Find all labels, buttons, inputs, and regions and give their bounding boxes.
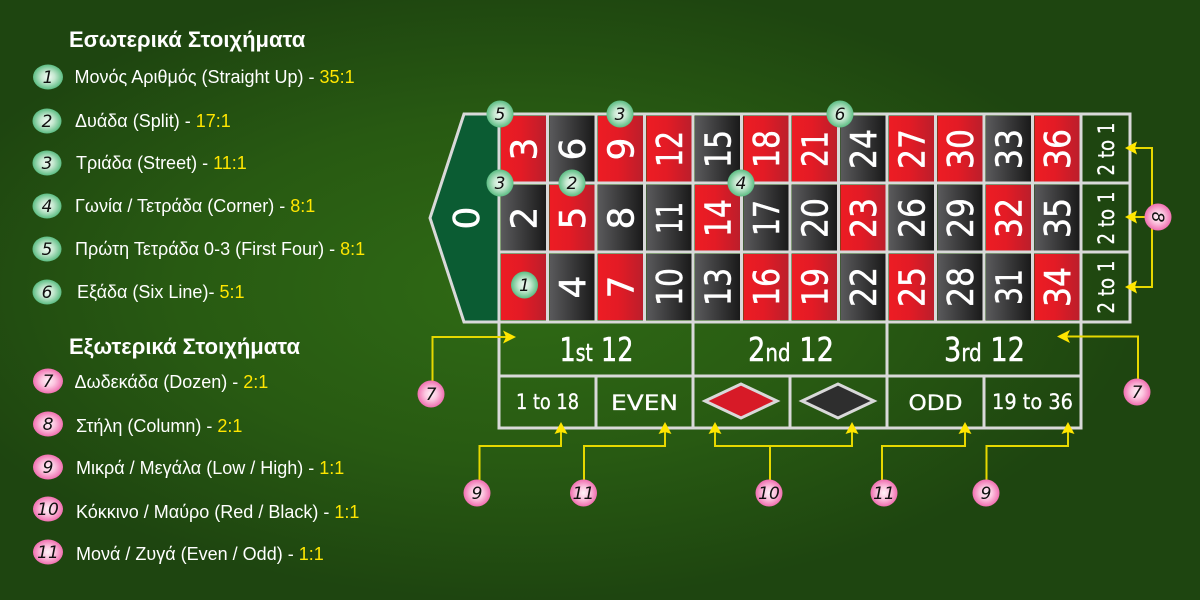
cell 27 — [889, 116, 934, 182]
badge 7 left — [418, 380, 444, 408]
cell 32 — [986, 185, 1031, 251]
cell 3: 3 — [504, 138, 545, 160]
cell 8 — [598, 185, 643, 251]
cell 20 — [792, 185, 837, 251]
cell 2 — [501, 185, 546, 251]
badge 3 — [486, 170, 514, 196]
cell 9: 9 — [601, 138, 642, 160]
legend row 11 — [33, 540, 324, 564]
outside bet labels: EVEN — [611, 391, 678, 415]
badge 11 right — [870, 480, 898, 506]
dozen labels: 2nd 12 — [748, 330, 834, 369]
legend row 9 — [33, 454, 344, 480]
cell 35 — [1034, 185, 1080, 251]
badge 5: 5 — [495, 105, 505, 125]
cell 7: 7 — [601, 276, 642, 298]
cell 23: 23 — [844, 198, 885, 238]
cell 4: 4 — [553, 276, 594, 298]
cell 8: 8 — [601, 207, 642, 229]
cell 11: 11 — [650, 202, 691, 234]
badge 11 right: 11 — [873, 484, 895, 504]
outside bet labels: ODD — [908, 391, 962, 415]
cell 7 — [598, 254, 643, 320]
badge 11 left: 11 — [573, 484, 594, 504]
arrow: 10 — [708, 422, 858, 482]
badge 6: 6 — [835, 105, 846, 125]
badge 7 right: 7 — [1132, 383, 1143, 403]
cell 36: 36 — [1038, 129, 1079, 169]
cell 10: 10 — [650, 268, 691, 306]
cell 26 — [889, 185, 934, 251]
arrow: 7 left — [432, 330, 516, 382]
cell 31 — [986, 254, 1031, 320]
legend row 2: Δυάδα (Split) - 17:1 — [75, 111, 231, 131]
cell 28: 28 — [941, 267, 982, 307]
column bets 2 to 1 — [1095, 122, 1120, 314]
badge 2: 2 — [567, 174, 577, 194]
badge 10: 10 — [758, 484, 780, 504]
legend row 5: Πρώτη Τετράδα 0-3 (First Four) - 8:1 — [75, 239, 365, 259]
cell 15 — [695, 116, 740, 182]
legend row 4: Γωνία / Τετράδα (Corner) - 8:1 — [75, 196, 315, 216]
cell 19 — [792, 254, 837, 320]
badge 6 — [826, 100, 854, 128]
cell 21 — [792, 116, 837, 182]
cell 23 — [840, 185, 886, 251]
cell 32: 32 — [989, 198, 1030, 238]
cell 24: 24 — [844, 129, 885, 169]
badge 3 street — [606, 100, 634, 128]
cell 33 — [986, 116, 1031, 182]
legend row 6 — [32, 280, 244, 304]
cell 20: 20 — [795, 198, 836, 238]
arrow: 9 left — [480, 422, 568, 482]
arrow: 11 left — [584, 422, 672, 482]
cell 3 — [501, 116, 546, 182]
dozen labels — [560, 330, 1025, 369]
badge 4: 4 — [736, 174, 746, 194]
legend row 1 — [33, 64, 355, 90]
zero pocket — [430, 114, 499, 322]
red diamond — [705, 384, 777, 418]
cell 12: 12 — [650, 131, 691, 167]
cell 18: 18 — [747, 130, 788, 168]
badge 11 left — [570, 480, 597, 506]
green badges on table — [486, 100, 854, 298]
arrow: 8 column — [1125, 142, 1152, 294]
legend row 4: 4 — [42, 197, 52, 217]
cell 28 — [938, 254, 982, 320]
cell 13: 13 — [698, 268, 739, 306]
badge 9 left — [464, 480, 490, 506]
cell 9 — [598, 116, 643, 182]
cell 22: 22 — [844, 267, 885, 307]
number cells — [501, 116, 1080, 320]
cell 6: 6 — [553, 138, 594, 160]
cell 13 — [695, 254, 740, 320]
heading: inside bets: Εσωτερικά Στοιχήματα — [69, 27, 306, 52]
cell 27: 27 — [892, 129, 933, 169]
cell 25: 25 — [892, 267, 933, 307]
legend row 2: 2 — [42, 112, 52, 132]
cell 1 — [501, 254, 546, 320]
legend row 10: Κόκκινο / Μαύρο (Red / Black) - 1:1 — [76, 502, 359, 522]
outside bet labels: 1 to 18 — [516, 390, 579, 414]
cell 22 — [840, 254, 886, 320]
cell 25 — [889, 254, 934, 320]
cell 4 — [550, 254, 594, 320]
cell 24 — [840, 116, 886, 182]
cell 33: 33 — [989, 129, 1030, 169]
legend row 3 — [32, 150, 247, 176]
cell 12 — [646, 116, 692, 182]
cell 5 — [550, 185, 594, 251]
legend row 7: Δωδεκάδα (Dozen) - 2:1 — [74, 372, 268, 392]
legend row 5: 5 — [42, 240, 52, 260]
legend row 10: 10 — [37, 500, 59, 520]
legend row 3: 3 — [42, 154, 52, 174]
legend row 1: 1 — [43, 68, 53, 88]
arrow: 11 right — [882, 422, 972, 482]
legend row 2 — [32, 108, 231, 134]
legend row 7 — [33, 368, 268, 394]
badge 7 left: 7 — [426, 385, 437, 405]
cell 11 — [646, 185, 692, 251]
cell 5: 5 — [553, 207, 594, 229]
cell 14: 14 — [698, 199, 739, 237]
black diamond — [802, 384, 874, 418]
cell 14 — [695, 185, 740, 251]
legend row 6: 6 — [42, 283, 53, 303]
badge 2 — [558, 170, 586, 196]
badge 1: 1 — [519, 276, 530, 296]
dozen labels: 1st 12 — [560, 330, 634, 369]
roulette table — [430, 114, 1130, 428]
badge 3 street: 3 — [615, 105, 625, 125]
cell 15: 15 — [698, 130, 739, 168]
cell 6 — [550, 116, 594, 182]
cell 30 — [938, 116, 982, 182]
cell 16: 16 — [747, 268, 788, 306]
cell 21: 21 — [795, 131, 836, 167]
dozen labels: 3rd 12 — [944, 330, 1025, 369]
column bets 2 to 1: 2 to 1 — [1095, 122, 1120, 176]
legend row 9: 9 — [43, 458, 53, 478]
cell 26: 26 — [892, 198, 933, 238]
column bets 2 to 1: 2 to 1 — [1095, 260, 1120, 314]
arrow: 7 right — [1057, 330, 1138, 380]
legend row 7: 7 — [43, 372, 54, 392]
badge 9 right — [972, 480, 1000, 506]
legend row 3: Τριάδα (Street) - 11:1 — [76, 153, 247, 173]
arrow: 9 right — [986, 422, 1074, 482]
panel: inside bets legend — [32, 27, 365, 304]
legend row 6: Εξάδα (Six Line)- 5:1 — [77, 282, 244, 302]
badge 7 right — [1124, 378, 1150, 406]
badge 5 — [486, 100, 514, 128]
legend row 11: 11 — [37, 543, 59, 563]
legend row 1: Μονός Αριθμός (Straight Up) - 35:1 — [74, 67, 355, 87]
legend row 8: Στήλη (Column) - 2:1 — [76, 416, 242, 436]
badge 9 left: 9 — [472, 484, 482, 504]
legend row 10 — [33, 496, 359, 522]
cell 18 — [744, 116, 788, 182]
cell 16 — [744, 254, 788, 320]
cell 10 — [646, 254, 692, 320]
cell 30: 30 — [941, 129, 982, 169]
badge 4 — [728, 170, 754, 196]
cell 29 — [938, 185, 982, 251]
cell 17: 17 — [747, 200, 788, 236]
panel: outside bets legend — [33, 334, 359, 564]
cell 31: 31 — [989, 269, 1030, 305]
cell 19: 19 — [795, 268, 836, 306]
legend row 5 — [32, 236, 365, 262]
badge 10 — [756, 480, 782, 506]
cell 2: 2 — [504, 207, 545, 229]
legend row 9: Μικρά / Μεγάλα (Low / High) - 1:1 — [76, 458, 344, 478]
pink badges — [418, 204, 1172, 506]
column bets 2 to 1: 2 to 1 — [1095, 192, 1120, 244]
cell 17 — [744, 185, 788, 251]
legend row 8 — [33, 412, 242, 436]
outside bet labels: 19 to 36 — [992, 390, 1073, 414]
cell 29: 29 — [941, 198, 982, 238]
badge 1 — [511, 272, 538, 298]
heading: outside bets: Εξωτερικά Στοιχήματα — [69, 334, 300, 359]
cell 36 — [1034, 116, 1080, 182]
legend row 4 — [32, 194, 315, 218]
badge 3: 3 — [495, 174, 505, 194]
badge 8: 8 — [1147, 212, 1167, 223]
cell 34: 34 — [1038, 267, 1079, 307]
badge 8 — [1144, 204, 1172, 230]
legend row 11: Μονά / Ζυγά (Even / Odd) - 1:1 — [76, 544, 324, 564]
cell 35: 35 — [1038, 198, 1079, 238]
cell 34 — [1034, 254, 1080, 320]
outside bet labels — [516, 390, 1073, 415]
zero pocket: 0 — [447, 207, 488, 229]
badge 9 right: 9 — [981, 484, 991, 504]
legend row 8: 8 — [43, 415, 54, 435]
